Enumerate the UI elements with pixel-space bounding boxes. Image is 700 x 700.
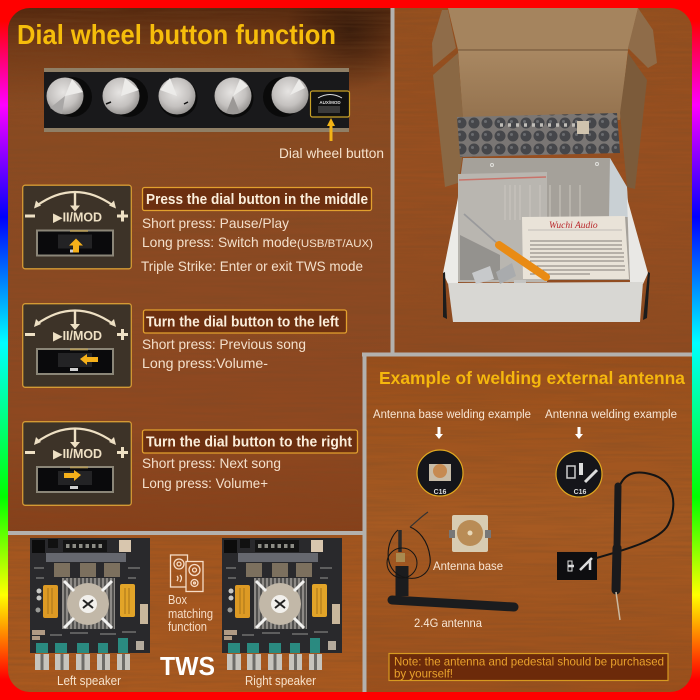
heading: turn right [142, 430, 358, 453]
text: press middle details [141, 215, 373, 274]
arrow: base example [435, 427, 443, 439]
knob 1 [46, 77, 92, 117]
icon: turn right [23, 422, 131, 505]
text: box matching function [168, 593, 213, 634]
photo: antenna base connector [449, 515, 491, 552]
heading: press middle: Press the dial button in the middle [146, 192, 368, 208]
knob 2 [102, 77, 148, 117]
text: turn right details [142, 455, 281, 491]
photo: antenna welding circle [556, 451, 602, 497]
instruction paper [522, 216, 629, 279]
label: antenna base: Antenna base [433, 559, 503, 573]
screwdriver [464, 214, 546, 277]
small dial button highlight: AUX/MOD [319, 100, 341, 105]
text: press middle details: (USB/BT/AUX) [297, 238, 373, 250]
text: press middle details: Short press: Pause/Play [142, 215, 289, 231]
icon: turn left [23, 304, 131, 387]
text: turn left details: Short press: Previous song [142, 336, 306, 352]
heading: press middle [142, 188, 372, 210]
panel: TWS background [8, 533, 364, 692]
instruction paper: Wuchi Audio [549, 221, 598, 231]
label: antenna base welding example: Antenna base welding example [373, 409, 531, 421]
label: antenna welding example: Antenna welding example [545, 409, 677, 421]
label: right speaker: Right speaker [245, 674, 316, 688]
panel: dial wheel button function [8, 0, 415, 535]
label: TWS: TWS [160, 651, 215, 681]
label: dial wheel button: Dial wheel button [279, 145, 384, 161]
arrow to dial wheel button [327, 118, 335, 141]
heading: turn right: Turn the dial button to the right [146, 434, 352, 450]
knob 3 [158, 78, 198, 118]
knob 5 [263, 76, 308, 117]
title: Dial wheel button function [17, 19, 336, 50]
amplifier front strip with knobs [44, 68, 350, 132]
ziplock bag [458, 172, 580, 282]
heading: turn left [144, 310, 346, 333]
callout: purchase note: by yourself! [394, 666, 453, 680]
bubble wrap [457, 113, 620, 157]
right speaker board [222, 538, 342, 670]
photo: 2.4G antenna [387, 512, 514, 607]
arrow: antenna example [575, 427, 583, 439]
panel: box contents background [392, 8, 692, 353]
heading: turn left: Turn the dial button to the left [146, 314, 339, 330]
text: press middle details: Long press: Switch mode [142, 234, 297, 250]
heading: antenna: Example of welding external antenna [379, 368, 685, 388]
text: turn left details: Long press:Volume- [142, 355, 268, 371]
text: box matching function: Box [168, 593, 188, 607]
callout: purchase note [389, 654, 668, 680]
photo: antenna welding circle: C16 [574, 489, 587, 496]
silver bag [447, 158, 630, 280]
text: box matching function: function [168, 620, 207, 634]
text: turn right details: Short press: Next song [142, 455, 281, 471]
icon: speakers [170, 555, 203, 592]
box lid [432, 8, 657, 189]
text: turn left details [142, 336, 306, 371]
text: box matching function: matching [168, 607, 213, 621]
icon: press middle [23, 185, 131, 269]
box white sides [443, 198, 650, 322]
text: turn right details: Long press: Volume+ [142, 475, 268, 491]
spare knobs [472, 263, 526, 284]
panel: antenna background [364, 354, 692, 692]
left speaker board [30, 538, 150, 670]
photo: base welding circle [417, 450, 463, 496]
callout: purchase note: Note: the antenna and pedestal should be purchased [394, 654, 664, 668]
text: press middle details: Triple Strike: Enter or exit TWS mode [141, 258, 363, 274]
photo: welded pcb with antenna [557, 472, 673, 620]
label: 2.4G antenna: 2.4G antenna [414, 616, 482, 630]
photo: open box with contents [432, 8, 657, 322]
knob 4 [214, 78, 254, 118]
photo: base welding circle: C16 [434, 489, 447, 496]
label: left speaker: Left speaker [57, 674, 121, 688]
small dial button highlight [310, 91, 350, 117]
